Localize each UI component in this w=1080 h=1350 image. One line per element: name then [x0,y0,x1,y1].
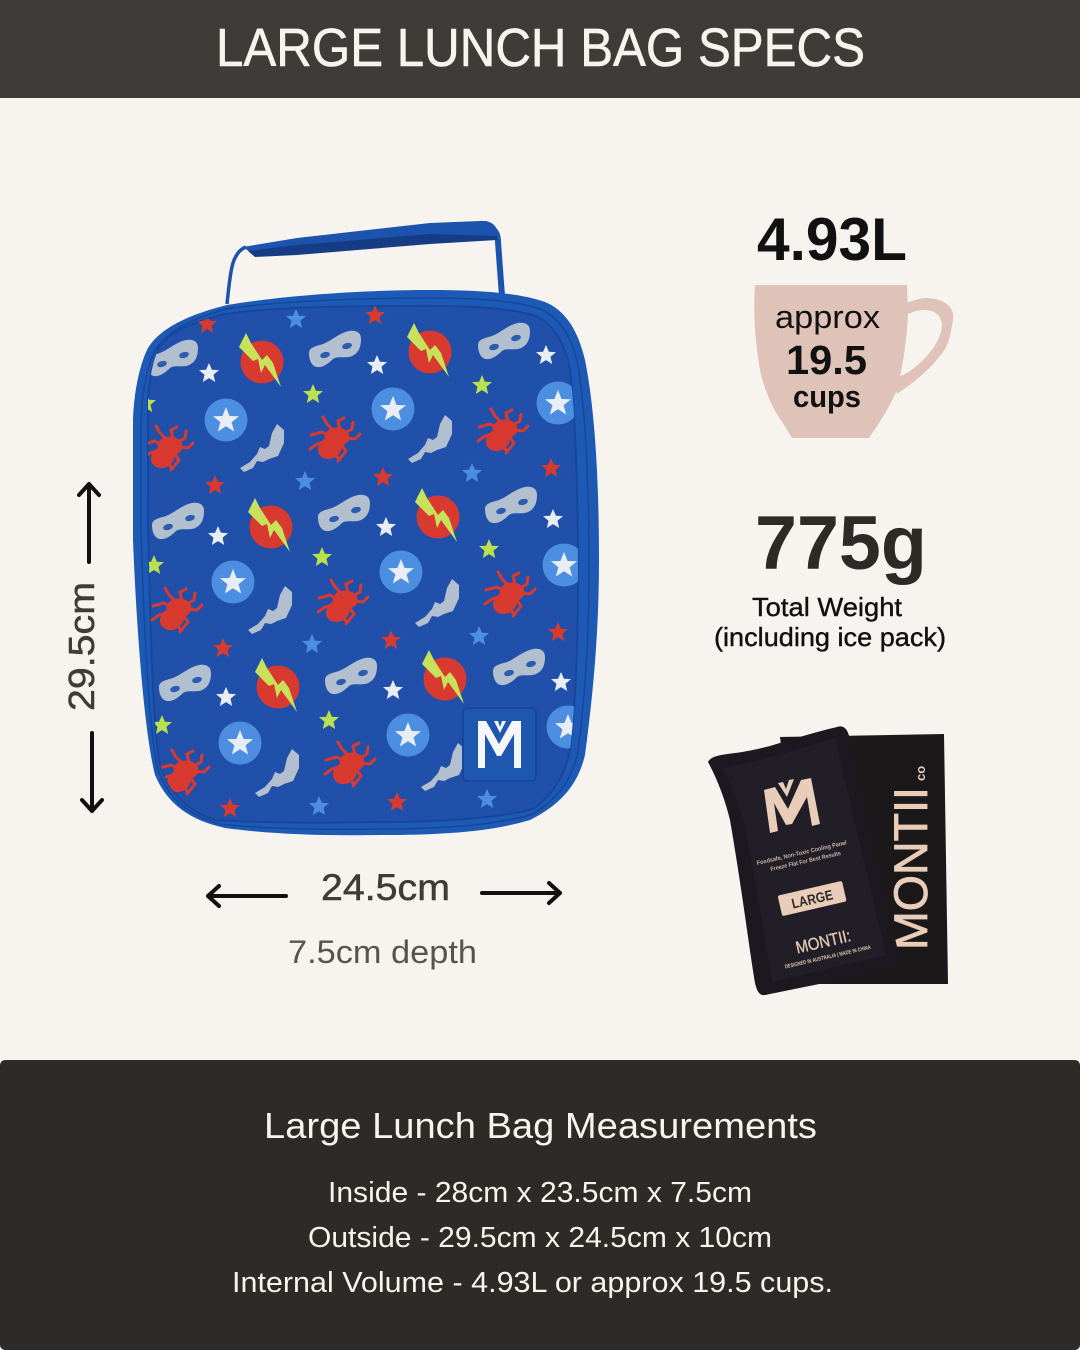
height label: 29.5cm [61,582,102,711]
volume stat: 19.5 [786,337,867,383]
width dimension [208,867,560,970]
green stars [136,375,499,734]
pack brand: DESIGNED IN AUSTRALIA | MADE IN CHINA [784,945,871,970]
outside dimensions: Outside - 29.5cm x 24.5cm x 10cm [308,1222,772,1254]
header bar [0,0,1080,98]
panel heading: Large Lunch Bag Measurements [264,1105,817,1146]
weight stat: (including ice pack) [714,622,946,652]
cooling pack: Foodsafe, Non-Toxic Cooling Panel [756,840,848,867]
weight caption: Total Weight [752,592,903,622]
bag front panel [148,306,578,823]
insulated cover: co [913,766,928,781]
bag logo patch [463,708,536,781]
down arrow [82,733,102,811]
depth label: 7.5cm depth [288,934,477,970]
ice pack and cover [708,726,948,995]
spiders [143,409,535,794]
left arrow [208,886,286,906]
width label: 24.5cm [321,867,450,908]
insulated cover: MONTII [884,787,937,950]
bag handle [227,221,502,304]
weight value: 775g [755,501,927,586]
cup text: approx [775,299,880,335]
up arrow [79,484,99,562]
pack logo [764,778,820,833]
blue stars [286,309,497,815]
size tag [778,881,847,916]
lunch bag illustration [133,221,599,835]
red stars [197,305,568,817]
white stars [199,345,571,706]
volume stat [754,206,953,438]
volume stat: cups [793,379,861,414]
inside dimensions: Inside - 28cm x 23.5cm x 7.5cm [328,1177,752,1209]
size tag: LARGE [790,886,834,911]
bag print pattern [136,305,590,817]
measurements panel [0,1060,1080,1350]
bag zip piping [141,298,589,829]
masks [146,323,545,701]
cooling pack: Freeze Flat For Best Results [770,851,842,873]
pack brand [779,922,871,970]
volume value: 4.93L [757,206,907,273]
lightning emblems [239,323,466,712]
bats [240,415,465,797]
title: LARGE LUNCH BAG SPECS [216,18,865,78]
right arrow [482,883,560,903]
shields [204,382,590,764]
insulated cover [780,734,948,984]
height dimension [61,484,102,811]
internal volume: Internal Volume - 4.93L or approx 19.5 cups. [232,1267,833,1299]
pack brand: MONTII: [794,926,853,957]
bag body outline [133,290,599,835]
cooling pack [708,726,900,995]
icon: cup [754,285,953,438]
weight stat [714,501,946,652]
